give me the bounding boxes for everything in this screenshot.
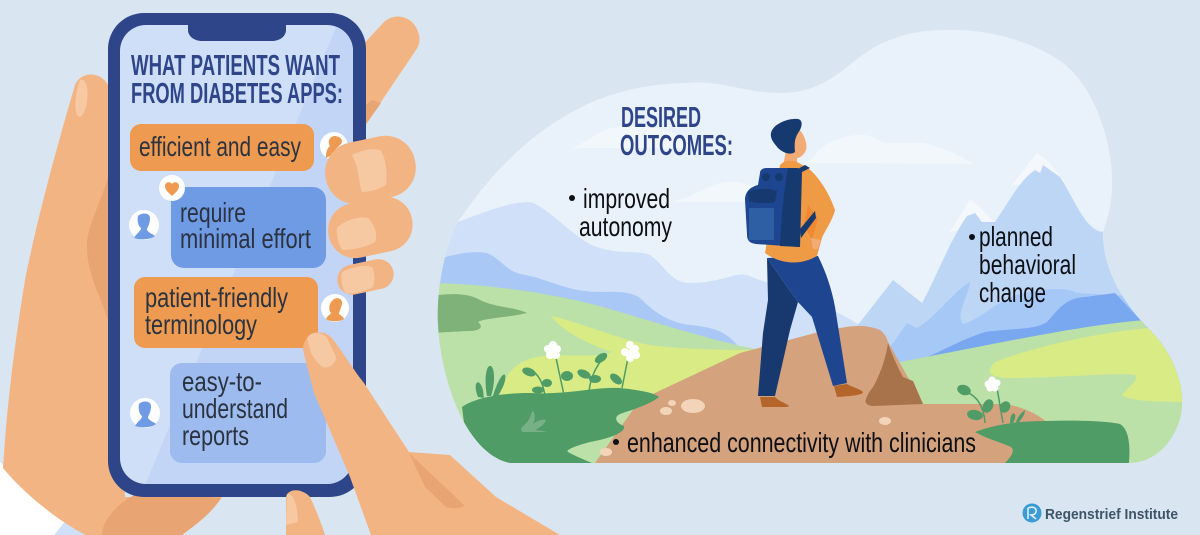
- icon: avatar blue: [129, 210, 159, 240]
- rocks and pebbles: [600, 399, 891, 456]
- icon: avatar blue lower: [130, 398, 160, 428]
- bubble: require minimal effort: require: [180, 197, 246, 228]
- phone body: [108, 13, 366, 497]
- shoes: [760, 397, 789, 407]
- text: planned behavioral change: planned: [979, 221, 1053, 252]
- snow caps: [950, 153, 1065, 232]
- bubble: patient-friendly terminology: [134, 277, 318, 348]
- rear leg: [758, 258, 798, 396]
- bubble: patient-friendly terminology: patient-friendly: [145, 282, 288, 313]
- text: planned behavioral change: [969, 221, 1076, 308]
- heading: desired outcomes: DESIRED: [621, 102, 701, 134]
- head and neck: [782, 128, 807, 172]
- text: improved autonomy: autonomy: [579, 211, 672, 242]
- backpack: [745, 168, 800, 247]
- sleeve cuff: [0, 462, 90, 535]
- heading: what patients want: [131, 50, 343, 110]
- text: improved autonomy: improved: [583, 183, 670, 214]
- panel: landscape scene: [430, 20, 1200, 470]
- bubble: require minimal effort: minimal effort: [180, 223, 311, 254]
- heading: desired outcomes: OUTCOMES:: [620, 130, 733, 162]
- plants and flower: right meadow: [956, 376, 1025, 423]
- hand: lower thumb tip: [286, 490, 325, 535]
- bubble: efficient and easy: [130, 124, 314, 171]
- heading: what patients want: FROM DIABETES APPS:: [131, 78, 343, 110]
- bubble: efficient and easy: efficient and easy: [139, 131, 301, 162]
- heading: what patients want: WHAT PATIENTS WANT: [131, 50, 340, 82]
- hand: right pointer finger and palm: [303, 332, 560, 535]
- bubble: easy-to-understand reports: easy-to-: [182, 366, 262, 397]
- torso: [765, 161, 835, 262]
- bubble: require minimal effort: [171, 187, 326, 268]
- text: improved autonomy: [569, 183, 672, 242]
- hair: [771, 119, 802, 154]
- icon: heart: [159, 175, 185, 201]
- bubble: easy-to-understand reports: reports: [182, 420, 249, 451]
- figure: hiker: [745, 119, 863, 407]
- hand: rear finger: [360, 16, 420, 130]
- hand: finger three: [334, 256, 396, 297]
- text: enhanced connectivity: enhanced connectivity with clinicians: [627, 427, 976, 458]
- front leg: [767, 256, 847, 386]
- bubble: patient-friendly terminology: terminology: [145, 309, 257, 340]
- icon: white flower centre: [621, 341, 640, 362]
- text: planned behavioral change: change: [979, 277, 1046, 308]
- icon: white flower left: [544, 341, 561, 359]
- hand: finger one: [320, 130, 421, 210]
- text: planned behavioral change: behavioral: [979, 249, 1076, 280]
- plants: left meadow: [476, 351, 628, 432]
- icon: avatar orange top: [320, 132, 348, 160]
- heading: desired outcomes: [620, 102, 733, 162]
- bubble: easy-to-understand reports: understand: [182, 393, 288, 424]
- logo: Regenstrief Institute: Regenstrief Institute: [1045, 506, 1178, 523]
- hand: left palm and thumb: [3, 74, 222, 535]
- icon: avatar orange lower: [321, 294, 349, 322]
- hand: finger two: [323, 192, 418, 263]
- logo: Regenstrief Institute: [1022, 504, 1178, 523]
- bubble: easy-to-understand reports: [170, 363, 326, 463]
